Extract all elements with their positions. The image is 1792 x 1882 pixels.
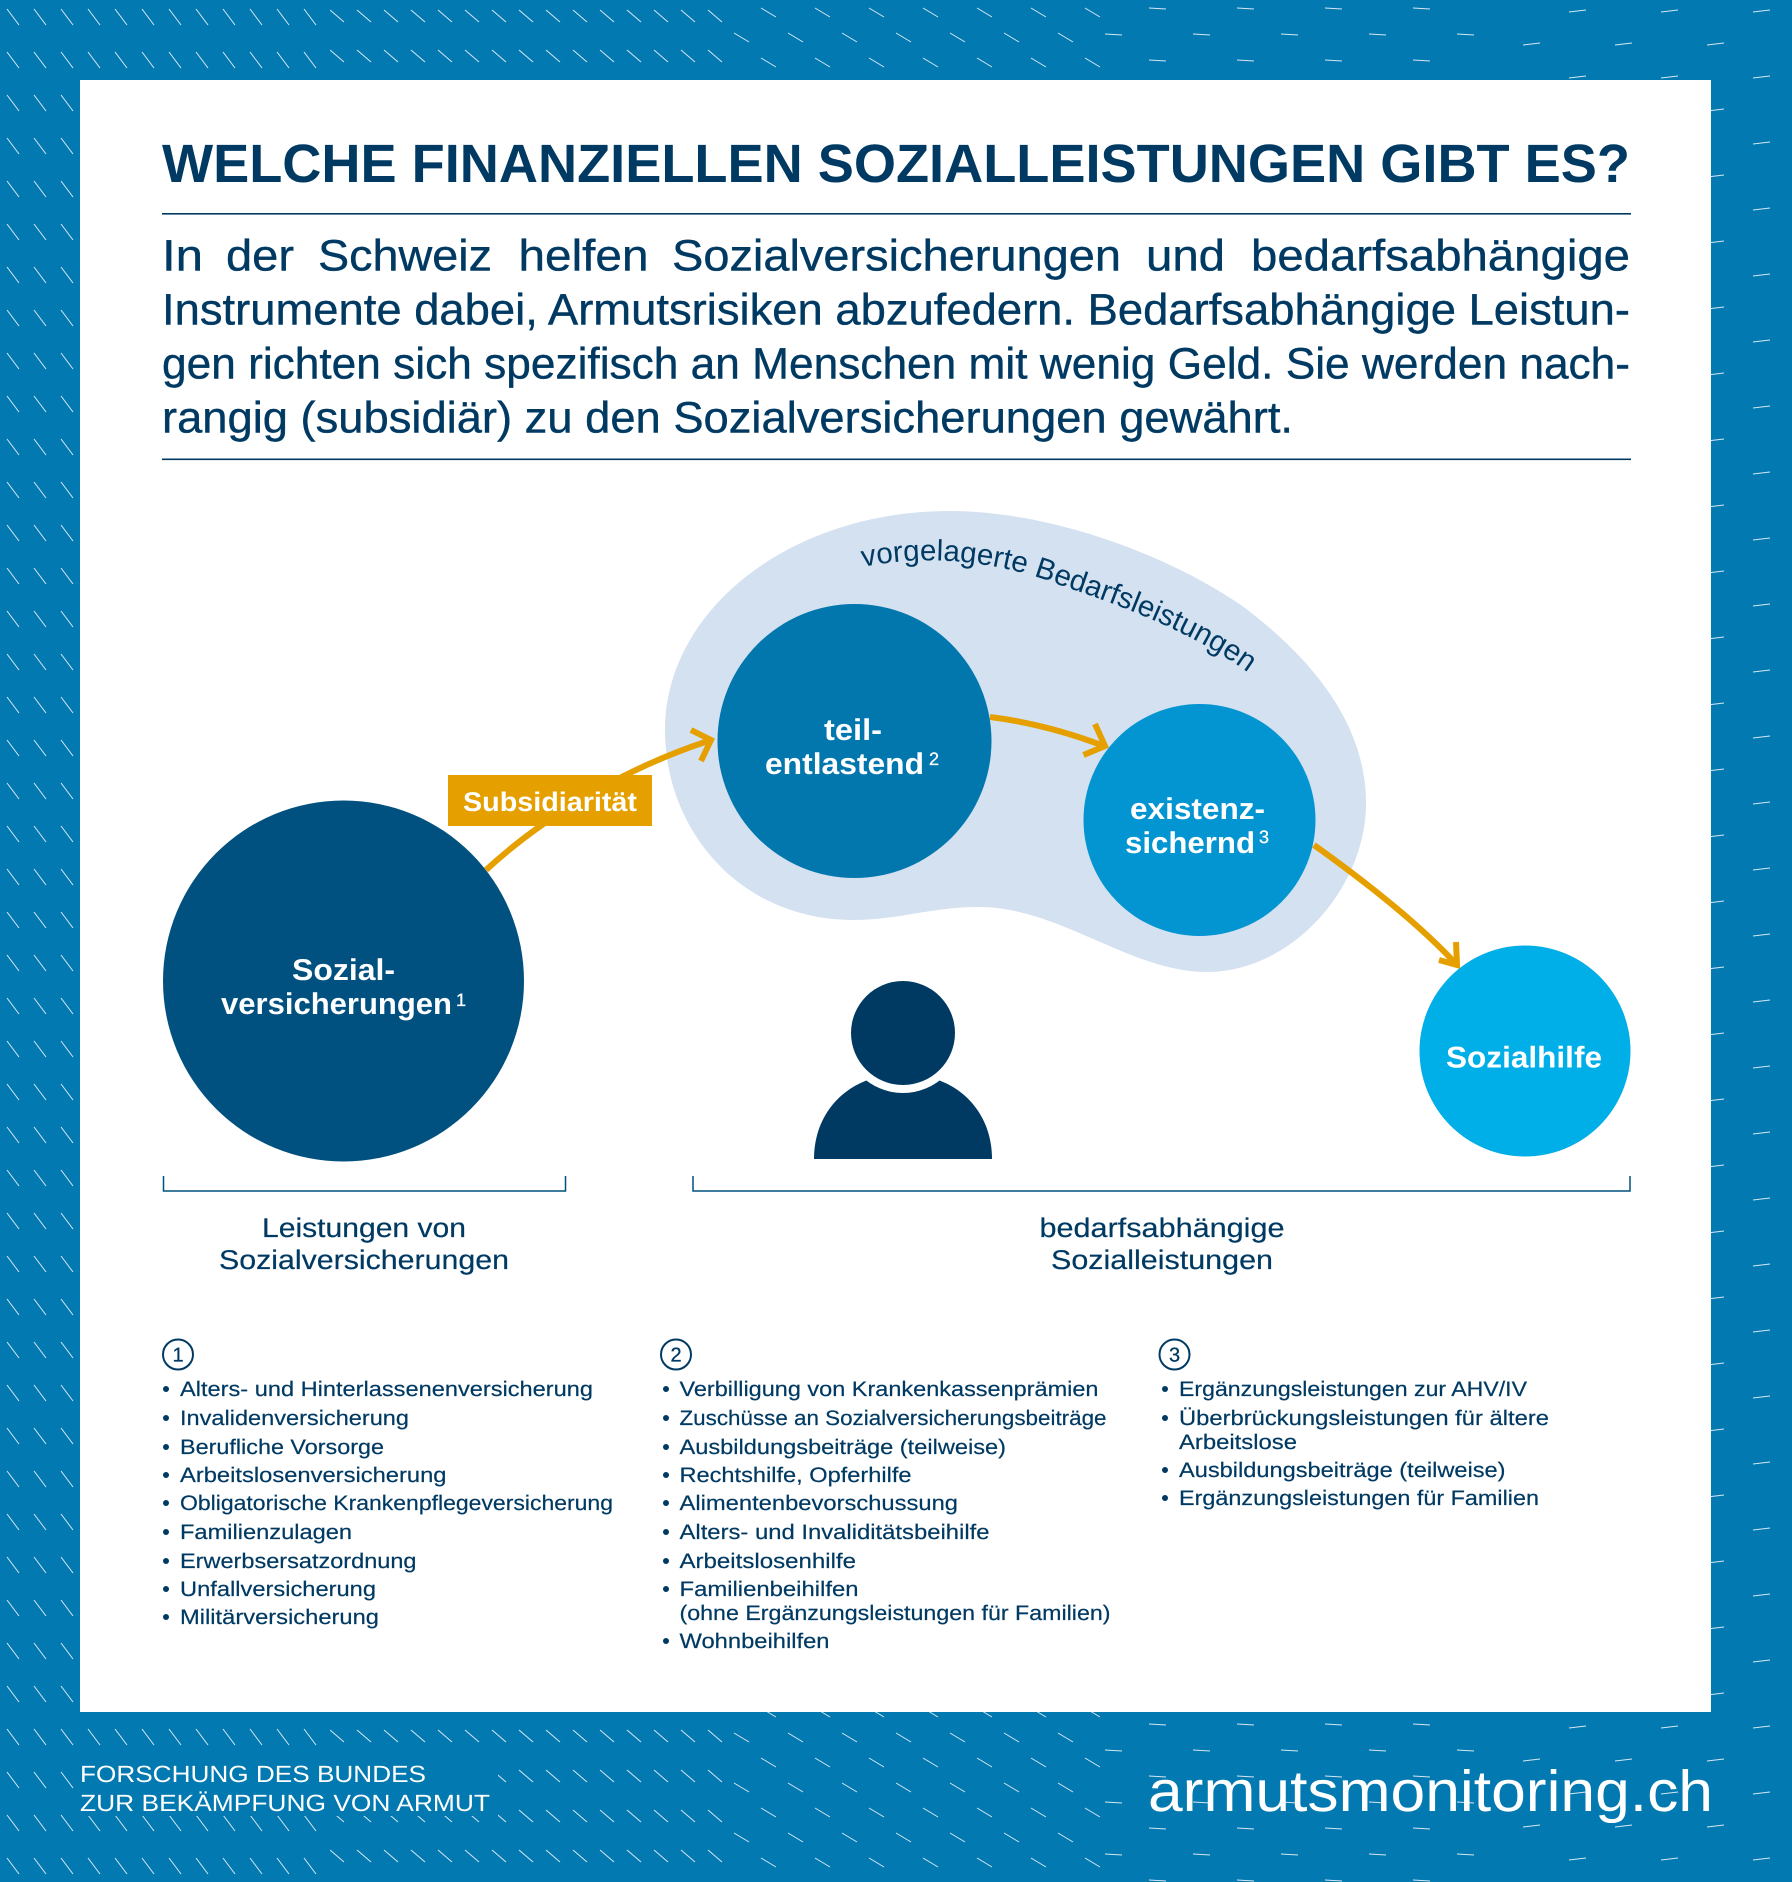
intro paragraph: Instrumente dabei, Armutsrisiken abzufedern. Bedarfsabhängige Leistun- xyxy=(162,286,1630,334)
number badge 3: 3 xyxy=(1169,1344,1180,1366)
title: WELCHE FINANZIELLEN SOZIALLEISTUNGEN GIBT ES? xyxy=(162,134,1630,194)
intro paragraph: In xyxy=(162,232,203,280)
list items 2: Rechtshilfe, Opferhilfe xyxy=(680,1464,912,1487)
arrow: Sozialversicherungen to teilentlastend xyxy=(486,730,711,870)
list items 2: Alimentenbevorschussung xyxy=(680,1492,958,1515)
list items 3: Arbeitslose xyxy=(1179,1431,1297,1454)
list items 2: (ohne Ergänzungsleistungen für Familien) xyxy=(680,1602,1110,1625)
circle: teilentlastend: teil- xyxy=(824,714,882,747)
list items 1: Familienzulagen xyxy=(180,1521,352,1544)
intro paragraph: der xyxy=(226,232,294,280)
intro paragraph: bedarfsabhängige xyxy=(1251,232,1630,280)
circle: existenzsichernd xyxy=(1084,704,1316,936)
footer: armutsmonitoring.ch: armutsmonitoring.ch xyxy=(1148,1759,1713,1824)
caption: Leistungen von Sozialversicherungen: Sozialversicherungen xyxy=(219,1245,509,1275)
footer: Forschung des Bundes xyxy=(80,1761,490,1816)
list items 1: Unfallversicherung xyxy=(180,1578,376,1601)
list 2: teilentlastend xyxy=(661,1340,1110,1653)
list items 2: Arbeitslosenhilfe xyxy=(680,1550,856,1573)
intro paragraph: gen richten sich spezifisch an Menschen mit wenig Geld. Sie werden nach- xyxy=(162,340,1630,388)
list items 3 xyxy=(1162,1378,1549,1510)
panel: white card xyxy=(80,80,1711,1712)
blob: vorgelagerte Bedarfsleistungen area xyxy=(665,511,1366,972)
list items 1: Militärversicherung xyxy=(180,1606,379,1629)
number badge 2: 2 xyxy=(670,1344,682,1366)
label: Subsidiarität: Subsidiarität xyxy=(463,787,637,817)
list items 1 xyxy=(163,1378,613,1629)
circle: existenzsichernd: sichernd xyxy=(1125,827,1255,860)
number badge 3 xyxy=(1160,1340,1190,1370)
intro paragraph: Sozialversicherungen xyxy=(672,232,1121,280)
list items 3: Ausbildungsbeiträge (teilweise) xyxy=(1179,1459,1506,1482)
list 1: Sozialversicherungen xyxy=(163,1340,613,1629)
caption: bedarfsabhängige Sozialleistungen: Sozialleistungen xyxy=(1051,1245,1273,1275)
list items 1: Erwerbsersatzordnung xyxy=(180,1550,416,1573)
footer: Forschung des Bundes: ZUR BEKÄMPFUNG VON ARMUT xyxy=(80,1790,490,1816)
circle: Sozialversicherungen: 1 xyxy=(456,990,466,1010)
number badge 2 xyxy=(661,1340,691,1370)
footer: Forschung des Bundes: FORSCHUNG DES BUNDES xyxy=(80,1761,426,1787)
circle: existenzsichernd: existenz- xyxy=(1130,793,1265,826)
arrow: teilentlastend to existenzsichernd xyxy=(990,717,1105,755)
list items 2 xyxy=(663,1378,1110,1653)
circle: Sozialversicherungen: versicherungen xyxy=(221,988,452,1021)
caption: bedarfsabhängige Sozialleistungen: bedarfsabhängige xyxy=(1040,1213,1284,1243)
list items 2: Alters- und Invaliditätsbeihilfe xyxy=(680,1521,990,1544)
number badge 1: 1 xyxy=(172,1344,184,1366)
list items 1: Arbeitslosenversicherung xyxy=(180,1464,446,1487)
list 3: existenzsichernd xyxy=(1160,1340,1549,1510)
icon: person xyxy=(814,973,992,1159)
list items 2: Zuschüsse an Sozialversicherungsbeiträge xyxy=(680,1407,1106,1430)
intro paragraph: helfen xyxy=(518,232,648,280)
list items 1: Obligatorische Krankenpflegeversicherung xyxy=(180,1492,613,1515)
list items 2: Familienbeihilfen xyxy=(680,1578,858,1601)
circle: Sozialversicherungen xyxy=(163,800,524,1162)
circle: Sozialversicherungen: Sozial- xyxy=(292,954,395,987)
number badge 1 xyxy=(163,1340,193,1370)
circle: Sozialhilfe: Sozialhilfe xyxy=(1446,1042,1602,1074)
caption: Leistungen von Sozialversicherungen: Leistungen von xyxy=(262,1213,466,1243)
circle: existenzsichernd: 3 xyxy=(1259,827,1269,847)
intro paragraph: rangig (subsidiär) zu den Sozialversicherungen gewährt. xyxy=(162,394,1293,442)
arrow: existenzsichernd to Sozialhilfe xyxy=(1314,845,1457,965)
circle: Sozialhilfe xyxy=(1420,946,1630,1156)
list items 3: Ergänzungsleistungen zur AHV/IV xyxy=(1179,1378,1527,1401)
list items 2: Verbilligung von Krankenkassenprämien xyxy=(680,1378,1098,1401)
circle: teilentlastend: 2 xyxy=(929,749,939,769)
list items 2: Wohnbeihilfen xyxy=(680,1630,830,1653)
intro paragraph: und xyxy=(1146,232,1225,280)
circle: teilentlastend xyxy=(718,604,992,878)
list items 1: Berufliche Vorsorge xyxy=(180,1436,384,1459)
list items 2: Ausbildungsbeiträge (teilweise) xyxy=(680,1436,1006,1459)
list items 1: Invalidenversicherung xyxy=(180,1407,409,1430)
label: Subsidiarität xyxy=(448,775,652,826)
list items 3: Überbrückungsleistungen für ältere xyxy=(1179,1407,1549,1430)
intro paragraph xyxy=(162,232,1630,442)
caption: bedarfsabhängige Sozialleistungen xyxy=(1040,1213,1284,1275)
circle: teilentlastend: entlastend xyxy=(765,748,924,781)
bracket: Leistungen von Sozialversicherungen xyxy=(164,1176,566,1191)
list items 3: Ergänzungsleistungen für Familien xyxy=(1179,1487,1539,1510)
list items 1: Alters- und Hinterlassenenversicherung xyxy=(180,1378,593,1401)
intro paragraph: Schweiz xyxy=(318,232,492,280)
curved label: vorgelagerte Bedarfsleistungen: vorgelagerte Bedarfsleistungen xyxy=(860,539,1254,672)
bracket: bedarfsabhängige Sozialleistungen xyxy=(693,1176,1630,1191)
caption: Leistungen von Sozialversicherungen xyxy=(219,1213,509,1275)
